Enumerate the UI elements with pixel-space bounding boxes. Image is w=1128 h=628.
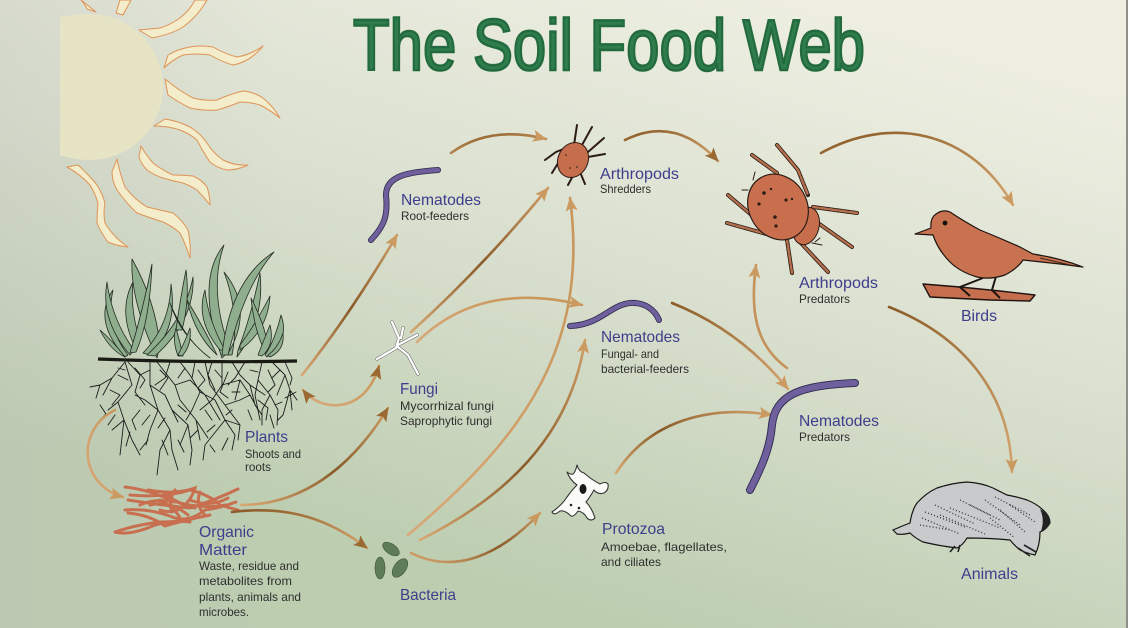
arrow: protozoa to predatory nematodes [616, 412, 772, 473]
label: predatory arthropods: Arthropods [799, 275, 878, 292]
label: protozoa: and ciliates [601, 555, 661, 569]
label: shredder arthropods: Arthropods [600, 166, 679, 183]
label: shredder arthropods: Shredders [600, 182, 651, 196]
label: shredder arthropods [600, 166, 679, 196]
arrow: organic matter to fungi [241, 408, 388, 505]
arrow: predatory arthropods to birds [821, 133, 1013, 205]
label: fungal and bacterial feeding nematodes [601, 329, 689, 376]
label: plants: roots [245, 460, 271, 474]
label: organic matter: plants, animals and [199, 590, 301, 604]
label: plants: Plants [245, 429, 288, 446]
icon: fungal and bacterial feeding nematode [570, 303, 659, 326]
label: predatory nematodes: Nematodes [799, 413, 879, 430]
label: organic matter: microbes. [199, 605, 249, 619]
label: root-feeding nematodes [401, 192, 481, 223]
soil line [98, 359, 297, 362]
label: plants: Shoots and [245, 447, 301, 461]
arrow: plants to root-feeding nematodes [302, 235, 397, 375]
arrow: bacteria to protozoa [411, 513, 540, 562]
arrow: predatory nematodes to predatory arthropods [754, 265, 787, 368]
label: fungi: Saprophytic fungi [400, 414, 492, 428]
arrow: plants to organic matter [88, 410, 123, 497]
label: bacteria: Bacteria [400, 587, 456, 604]
label: predatory nematodes [799, 413, 879, 444]
arrow: bacteria to bacterial-feeding nematodes [420, 340, 585, 540]
icon: sun [60, 0, 280, 258]
arrow: predatory arthropods to animals [889, 307, 1012, 472]
title: The Soil Food Web [353, 6, 865, 86]
label: plants [245, 429, 301, 474]
label: fungal and bacterial feeding nematodes: Fungal- and [601, 347, 659, 361]
icon: plants shoots and roots [90, 245, 297, 475]
grass leaves [100, 245, 284, 358]
label: protozoa: Protozoa [602, 521, 665, 538]
icon: shredder arthropod [545, 125, 605, 185]
label: fungi: Fungi [400, 381, 438, 398]
label: fungal and bacterial feeding nematodes: bacterial-feeders [601, 362, 689, 376]
label: root-feeding nematodes: Root-feeders [401, 209, 469, 223]
label: organic matter [199, 524, 301, 619]
arrow: root-feeding nematodes to shredder arthropods [451, 134, 546, 153]
label: root-feeding nematodes: Nematodes [401, 192, 481, 209]
icon: organic matter [115, 487, 238, 533]
arrow: organic matter to bacteria [232, 510, 367, 548]
label: protozoa [601, 521, 727, 569]
label: organic matter: Matter [199, 542, 248, 559]
label: organic matter: Waste, residue and [199, 559, 299, 573]
icon: animal, mole [893, 482, 1050, 556]
label: fungi: Mycorrhizal fungi [400, 399, 494, 413]
arrow: fungi to shredder arthropods [411, 188, 548, 332]
icon: predatory nematode [750, 383, 855, 490]
label: fungi [400, 381, 494, 428]
icon: root-feeding nematode [371, 170, 438, 240]
label: predatory arthropods: Predators [799, 292, 850, 306]
label: predatory arthropods [799, 275, 878, 306]
arrow: fungi to fungal-feeding nematodes [417, 298, 582, 342]
arrow: fungal-feeding nematodes to predatory nematodes [672, 303, 788, 389]
label: predatory nematodes: Predators [799, 430, 850, 444]
label: animals: Animals [961, 566, 1018, 583]
label: organic matter: metabolites from [199, 574, 292, 588]
icon: protozoa [552, 465, 608, 520]
label: protozoa: Amoebae, flagellates, [601, 540, 727, 554]
icon: fungi [377, 322, 418, 374]
label: fungal and bacterial feeding nematodes: Nematodes [601, 329, 680, 346]
icon: predatory arthropod [727, 145, 857, 273]
roots [90, 362, 297, 475]
icon: bacteria [375, 539, 411, 580]
arrow: shredder arthropods to predatory arthropods [625, 131, 718, 161]
label: organic matter: Organic [199, 524, 254, 541]
icon: bird [915, 211, 1083, 301]
arrow: plants and fungi two-way [303, 366, 379, 405]
arrow: bacteria to shredder arthropods [408, 198, 573, 535]
label: birds: Birds [961, 308, 997, 325]
